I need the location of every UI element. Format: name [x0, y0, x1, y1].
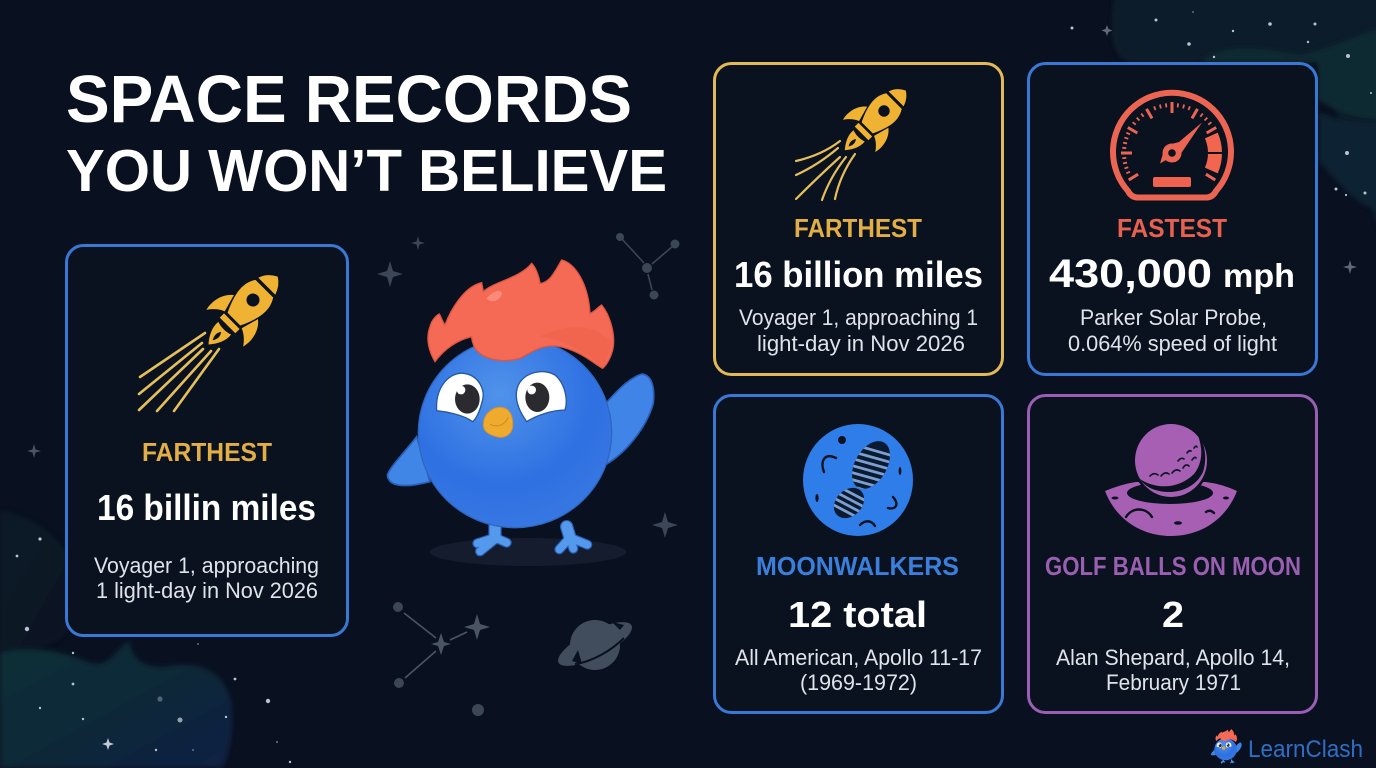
label: fastest: FASTEST: [1117, 213, 1227, 243]
description: Voyager 1, approaching: [94, 553, 319, 578]
logo: LearnClash: [1211, 729, 1363, 763]
description: Voyager 1, approaching 1: [739, 305, 978, 330]
description: light-day in Nov 2026: [757, 331, 965, 356]
value: 430,000 mph: mph: [1223, 257, 1295, 294]
description: All American, Apollo 11-17: [735, 645, 982, 670]
decorative stars and constellations: [377, 233, 680, 716]
character: blue bird mascot waving: [387, 260, 654, 566]
panel: featured farthest record: [66, 246, 348, 636]
icon: rocket with curved trails: [796, 73, 922, 200]
icon: ringed planet: [553, 614, 637, 674]
description: [735, 645, 982, 695]
description: Parker Solar Probe,: [1080, 305, 1267, 330]
value: 2: 2: [1162, 594, 1184, 635]
panel: farthest card: [714, 64, 1002, 374]
icon: speedometer: [1113, 93, 1231, 198]
description: [1056, 645, 1290, 695]
value: 12 total: 12 total: [788, 594, 927, 635]
description: (1969-1972): [800, 670, 917, 695]
label: farthest: FARTHEST: [794, 213, 922, 243]
title: SPACE RECORDS: [66, 62, 632, 137]
logo: LearnClash: LearnClash: [1248, 736, 1363, 763]
value: 16 billion miles: 16 billion miles: [734, 254, 983, 295]
value: 430,000 mph: 430,000: [1049, 252, 1212, 296]
description: [739, 305, 978, 356]
value: 16 billin miles: 16 billin miles: [97, 487, 316, 528]
title: YOU WON’T BELIEVE: [66, 138, 667, 204]
description: [1068, 305, 1277, 356]
description: Alan Shepard, Apollo 14,: [1056, 645, 1290, 670]
description: [94, 553, 319, 603]
panel: golf balls card: [1028, 396, 1316, 712]
panel: moonwalkers card: [714, 396, 1002, 712]
value: 430,000 mph: [1049, 252, 1295, 296]
description: 0.064% speed of light: [1068, 331, 1277, 356]
icon: rocket with trails: [139, 257, 296, 411]
description: 1 light-day in Nov 2026: [96, 578, 318, 603]
panel: fastest card: [1028, 64, 1316, 374]
description: February 1971: [1106, 670, 1241, 695]
label: farthest: FARTHEST: [142, 437, 272, 467]
icon: moon with bootprint: [803, 424, 913, 536]
label: moonwalkers: MOONWALKERS: [756, 551, 959, 581]
label: golf balls on moon: GOLF BALLS ON MOON: [1045, 551, 1301, 581]
title: [66, 62, 667, 204]
icon: golf ball in crater: [1105, 422, 1237, 536]
